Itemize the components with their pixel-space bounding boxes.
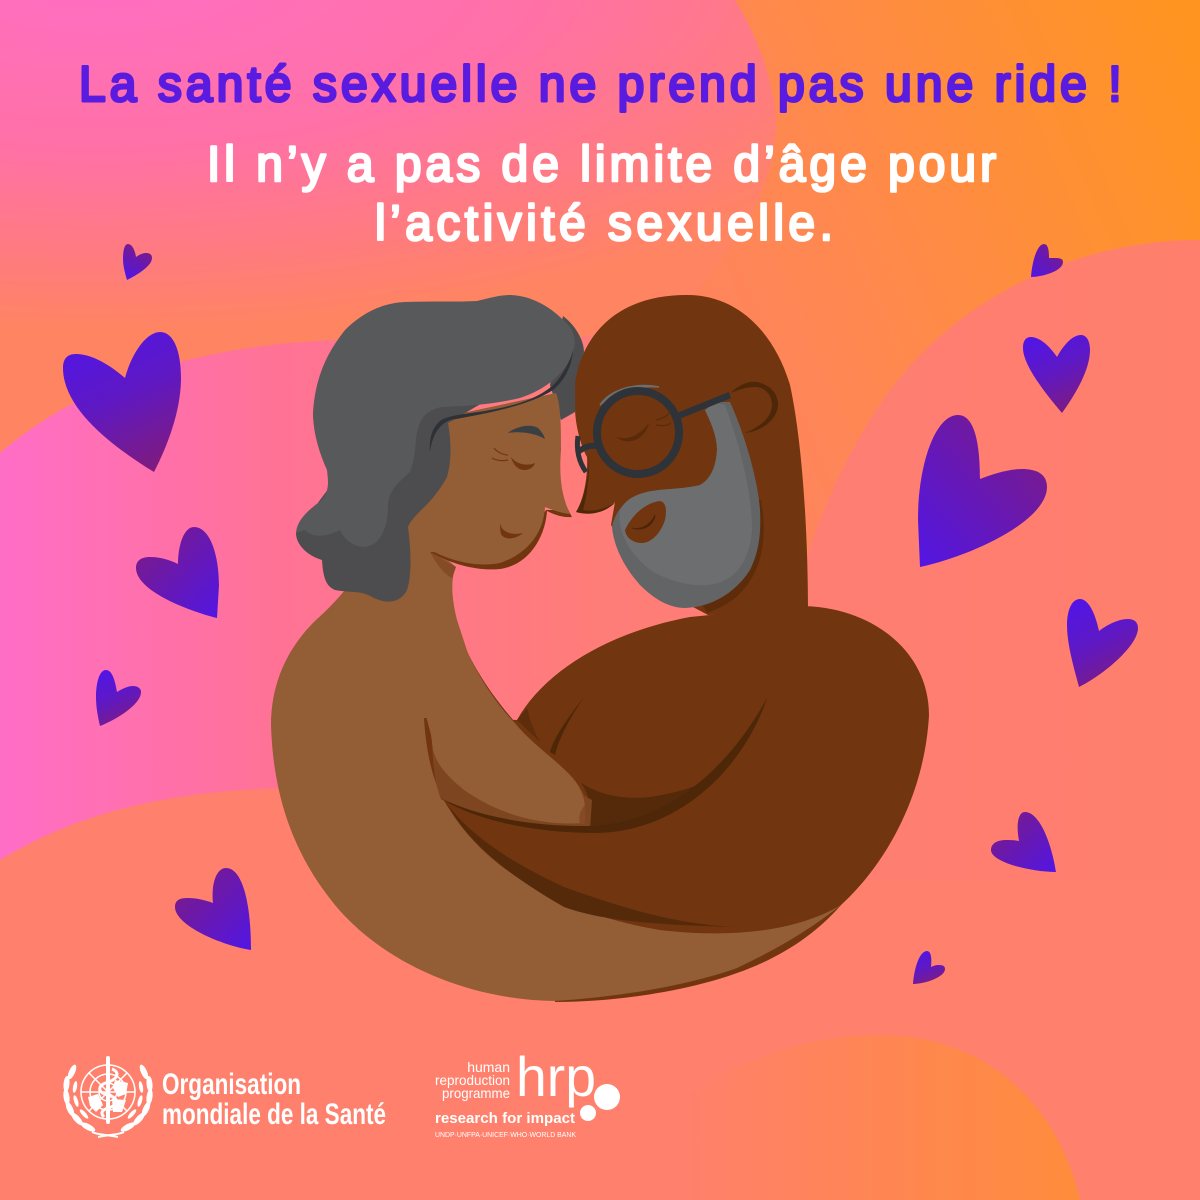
man mouth xyxy=(625,501,666,543)
woman closed eye xyxy=(511,457,535,470)
wreath left xyxy=(62,1063,118,1137)
man chest crease xyxy=(550,697,584,755)
hearts left xyxy=(63,244,251,950)
tagline: research for impact xyxy=(435,1111,575,1127)
subtitle: l’activité sexuelle. xyxy=(375,196,833,251)
woman smile xyxy=(500,523,523,538)
heart lower right xyxy=(991,812,1056,872)
man glasses xyxy=(577,391,730,474)
subtitle xyxy=(207,137,996,251)
programme name: human xyxy=(467,1059,510,1075)
woman chin shadow xyxy=(430,510,547,569)
man body xyxy=(424,606,929,933)
man closed eye xyxy=(616,423,649,441)
man eye lashes xyxy=(656,413,671,426)
shoulder wedge shadow xyxy=(517,708,540,742)
woman body xyxy=(271,520,841,1001)
background: middle pink and coral wave xyxy=(0,240,1200,1200)
logo: WHO emblem xyxy=(62,1056,154,1137)
hearts right xyxy=(913,244,1138,984)
man head and neck xyxy=(575,295,808,615)
heart middle left xyxy=(136,527,219,618)
programme name: programme xyxy=(442,1085,510,1101)
thumb edge shade xyxy=(578,785,589,826)
woman body shadow xyxy=(555,905,841,1002)
woman eye lashes xyxy=(492,448,508,461)
woman upper hair xyxy=(296,295,575,547)
heart bottom left xyxy=(175,868,251,950)
woman lower hair xyxy=(296,350,573,602)
shadow under hand xyxy=(581,777,713,828)
man beard shadow xyxy=(700,500,764,613)
background: bottom-right orange blob xyxy=(590,1035,1080,1200)
heart middle right xyxy=(1067,599,1138,687)
woman back hair xyxy=(550,316,584,420)
heart small top right xyxy=(1031,244,1063,277)
subtitle: Il n’y a pas de limite d’âge pour xyxy=(207,137,996,192)
bridge xyxy=(579,446,597,451)
lens xyxy=(597,391,679,474)
logo: HRP xyxy=(435,1045,620,1139)
heart small bottom right xyxy=(913,951,945,984)
man eyebrow xyxy=(600,386,659,405)
illustration: embracing older couple xyxy=(271,295,929,1002)
heart small lower left xyxy=(96,670,141,726)
globe xyxy=(81,1065,135,1119)
heart large left xyxy=(63,332,181,472)
logo text: Organisation mondiale de la Santé: Organisation xyxy=(162,1068,301,1101)
man nose line xyxy=(576,453,616,514)
programme name xyxy=(435,1059,510,1101)
woman face xyxy=(400,393,570,600)
man ear xyxy=(731,382,778,433)
temple arm xyxy=(678,395,730,416)
forearm edge sliver xyxy=(464,645,565,775)
hrp wordmark: hrp xyxy=(516,1045,596,1108)
woman forearm and hand xyxy=(400,620,586,823)
man beard inner xyxy=(620,402,752,585)
man lower lip xyxy=(632,515,655,529)
man beard outer xyxy=(612,402,760,608)
logo text: Organisation mondiale de la Santé xyxy=(162,1068,386,1131)
hand finger shade xyxy=(579,803,588,824)
heart large right xyxy=(918,415,1047,567)
title: La santé sexuelle ne prend pas une ride ! xyxy=(79,57,1122,112)
woman forearm shade xyxy=(432,737,592,829)
far lens xyxy=(577,436,586,472)
programme name: reproduction xyxy=(435,1072,510,1088)
woman neck shadow xyxy=(430,552,456,578)
man arm crease xyxy=(440,698,767,833)
man arm fold shadow xyxy=(446,803,737,927)
wreath right xyxy=(98,1063,154,1137)
rod xyxy=(106,1056,110,1124)
woman hair parting line xyxy=(430,347,573,452)
heart small top left xyxy=(123,244,152,280)
background: top-left pink blob xyxy=(0,0,776,480)
background: lower coral wave xyxy=(0,788,1200,1200)
woman nose shadow xyxy=(545,470,572,517)
heart upper right xyxy=(1023,335,1090,413)
serpent xyxy=(100,1069,117,1117)
continents xyxy=(88,1080,128,1112)
logo text: Organisation mondiale de la Santé: mondiale de la Santé xyxy=(162,1098,386,1131)
woman eyebrow xyxy=(508,426,545,439)
dots xyxy=(594,1084,620,1110)
partners: UNDP·UNFPA·UNICEF·WHO·WORLD BANK xyxy=(435,1132,576,1139)
